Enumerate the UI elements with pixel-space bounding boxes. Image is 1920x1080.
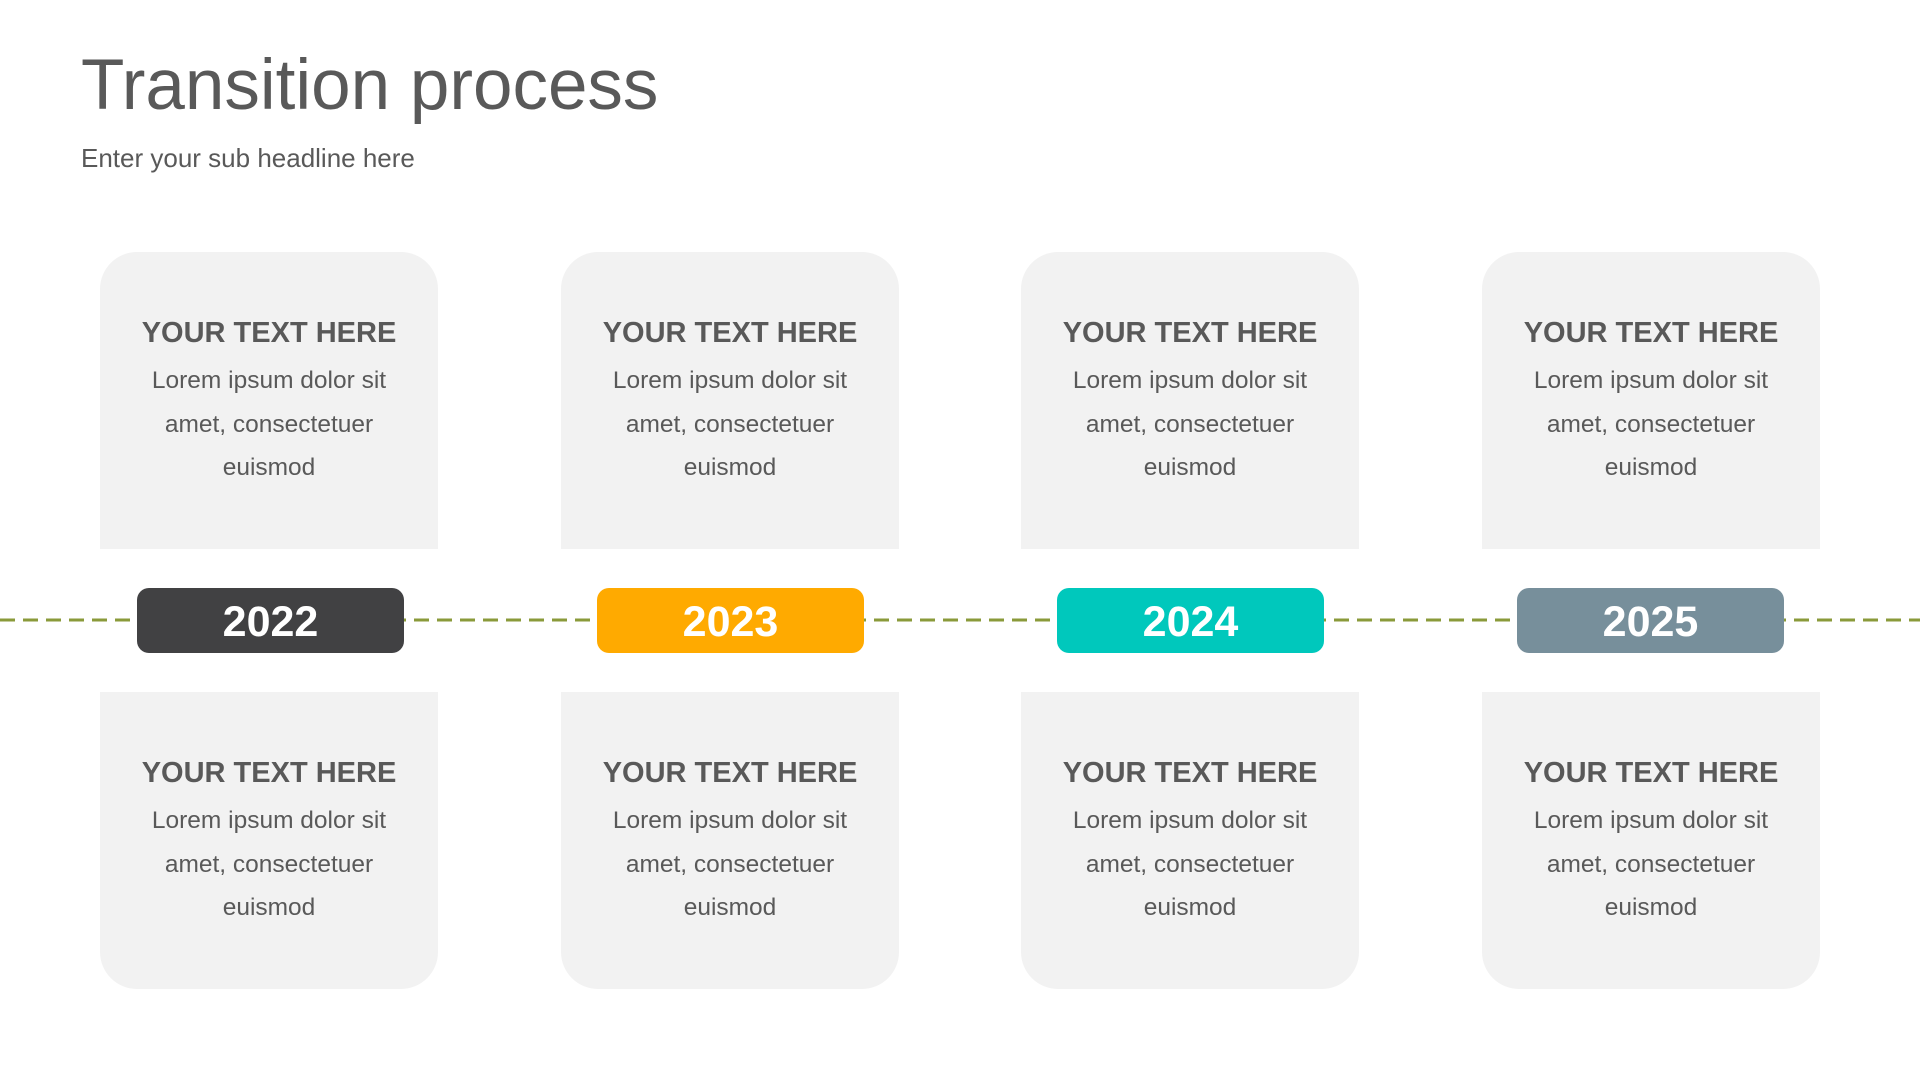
- card: 2025 bottom: YOUR TEXT HERE: [1524, 757, 1778, 789]
- card: 2025 bottom: amet, consectetuer: [1547, 850, 1755, 878]
- pill: 2024: [1057, 588, 1324, 653]
- card: 2023 top: YOUR TEXT HERE: [603, 317, 857, 349]
- subtitle: Enter your sub headline here: [81, 143, 415, 173]
- card: 2022 top: Lorem ipsum dolor sit: [152, 367, 386, 394]
- card: 2022 bottom: euismod: [223, 894, 315, 921]
- pill: 2022: 2022: [223, 598, 318, 646]
- pill: 2022: [137, 588, 404, 653]
- card: 2024 top: [1021, 252, 1359, 549]
- card: 2023 top: euismod: [684, 454, 776, 481]
- pill: 2025: [1517, 588, 1784, 653]
- card: 2022 bottom: amet, consectetuer: [165, 850, 373, 878]
- card: 2024 bottom: euismod: [1144, 894, 1236, 921]
- card: 2025 bottom: euismod: [1605, 894, 1697, 921]
- card: 2023 top: Lorem ipsum dolor sit: [613, 367, 847, 394]
- card: 2025 top: Lorem ipsum dolor sit: [1534, 367, 1768, 394]
- pill: 2023: [597, 588, 864, 653]
- pill: 2025: 2025: [1603, 598, 1698, 646]
- timeline dashed line: [0, 618, 1920, 622]
- pill: 2023: 2023: [683, 598, 778, 646]
- card: 2023 bottom: Lorem ipsum dolor sit: [613, 807, 847, 834]
- card: 2025 top: YOUR TEXT HERE: [1524, 317, 1778, 349]
- card: 2024 top: euismod: [1144, 454, 1236, 481]
- card: 2025 bottom: Lorem ipsum dolor sit: [1534, 807, 1768, 834]
- card: 2022 bottom: Lorem ipsum dolor sit: [152, 807, 386, 834]
- card: 2022 bottom: YOUR TEXT HERE: [142, 757, 396, 789]
- card: 2025 top: amet, consectetuer: [1547, 410, 1755, 438]
- card: 2022 top: YOUR TEXT HERE: [142, 317, 396, 349]
- card: 2022 top: [100, 252, 438, 549]
- card: 2024 bottom: [1021, 692, 1359, 989]
- card: 2024 top: YOUR TEXT HERE: [1063, 317, 1317, 349]
- card: 2025 top: euismod: [1605, 454, 1697, 481]
- card: 2025 bottom: [1482, 692, 1820, 989]
- card: 2024 bottom: Lorem ipsum dolor sit: [1073, 807, 1307, 834]
- card: 2022 bottom: [100, 692, 438, 989]
- card: 2024 bottom: YOUR TEXT HERE: [1063, 757, 1317, 789]
- pill: 2024: 2024: [1143, 598, 1238, 646]
- card: 2023 top: [561, 252, 899, 549]
- card: 2023 bottom: [561, 692, 899, 989]
- card: 2023 bottom: YOUR TEXT HERE: [603, 757, 857, 789]
- card: 2023 bottom: amet, consectetuer: [626, 850, 834, 878]
- card: 2025 top: [1482, 252, 1820, 549]
- card: 2022 top: amet, consectetuer: [165, 410, 373, 438]
- title: Transition process: [81, 46, 658, 125]
- card: 2022 top: euismod: [223, 454, 315, 481]
- card: 2024 bottom: amet, consectetuer: [1086, 850, 1294, 878]
- card: 2023 bottom: euismod: [684, 894, 776, 921]
- card: 2024 top: Lorem ipsum dolor sit: [1073, 367, 1307, 394]
- card: 2024 top: amet, consectetuer: [1086, 410, 1294, 438]
- card: 2023 top: amet, consectetuer: [626, 410, 834, 438]
